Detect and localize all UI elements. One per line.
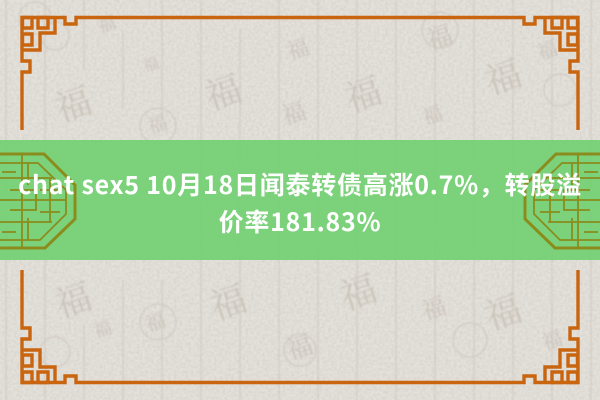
background: paper with faint 福 characters: 福 <box>90 313 115 344</box>
background: paper with faint 福 characters: 福 <box>478 281 528 340</box>
background: paper with faint 福 characters: 福 <box>203 271 253 330</box>
background: paper with faint 福 characters: 福 <box>48 269 98 328</box>
green title band <box>0 140 600 260</box>
background: paper with faint 福 characters: 福 <box>283 30 313 67</box>
background: paper with faint 福 characters: 福 <box>141 304 169 338</box>
background: paper with faint 福 characters: 福 <box>538 322 566 356</box>
background: paper with faint 福 characters: 福 <box>533 32 561 66</box>
background: paper with faint 福 characters: 福 <box>198 61 248 120</box>
background: paper with faint 福 characters: 福 <box>281 324 317 368</box>
background: paper with faint 福 characters: 福 <box>416 286 450 327</box>
background: paper with faint 福 characters: 福 <box>421 14 457 58</box>
title: chat sex5 10月18日闻泰转债高涨0.7%，转股溢 <box>18 166 582 202</box>
background: paper with faint 福 characters: 福 <box>276 91 310 132</box>
title second line: 价率181.83% <box>219 203 381 239</box>
background: paper with faint 福 characters: 福 <box>94 8 119 39</box>
background: paper with faint 福 characters: 福 <box>143 106 171 140</box>
background: paper with faint 福 characters: 福 <box>338 63 388 122</box>
background: paper with faint 福 characters: 福 <box>333 261 383 320</box>
background: paper with faint 福 characters: 福 <box>139 50 162 77</box>
background: paper with faint 福 characters: 福 <box>48 73 98 132</box>
background: paper with faint 福 characters: 福 <box>478 46 528 105</box>
background: paper with faint 福 characters: 福 <box>418 97 446 131</box>
